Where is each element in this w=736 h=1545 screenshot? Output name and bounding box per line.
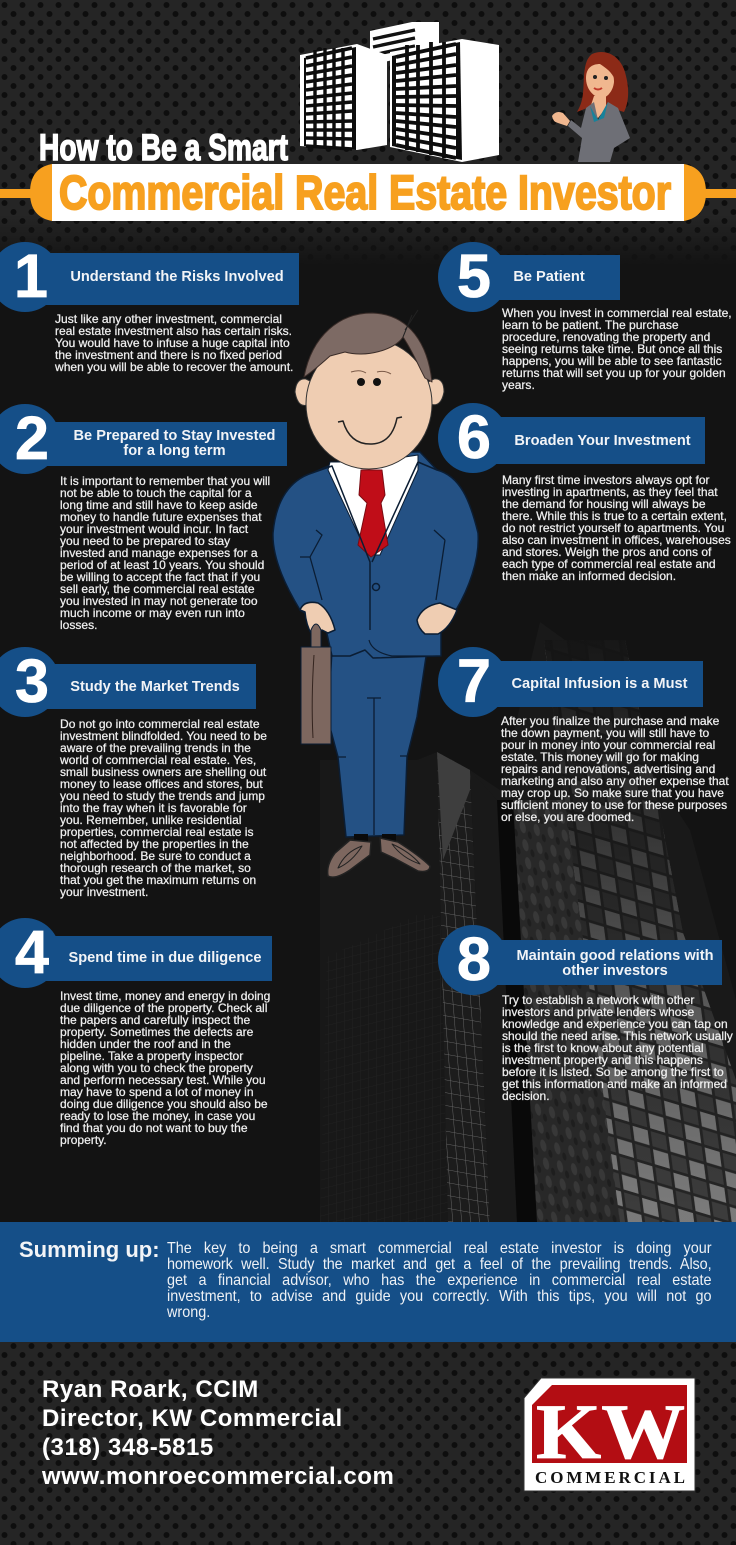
- step title: [74, 428, 275, 459]
- panel: step 8: [438, 925, 733, 1103]
- badge circle: [438, 403, 508, 473]
- step text: sufficient money to use for these purposes: [501, 798, 727, 812]
- illustration: businessman with briefcase: [272, 310, 479, 878]
- step text: estate. This money will go for making: [501, 750, 699, 764]
- step text: investors and private lenders whose: [502, 1005, 694, 1019]
- logo: KW Commercial: COMMERCIAL: [535, 1468, 685, 1487]
- step text: real estate investment also has certain risks.: [55, 324, 292, 338]
- step text: not affected by the properties in the: [60, 837, 249, 851]
- step title: [516, 948, 714, 979]
- step text: investment property and this happens: [502, 1053, 703, 1067]
- step text: you need to be prepared to stay: [60, 534, 230, 548]
- step text: find that you do not want to buy the: [60, 1121, 248, 1135]
- step text: thorough research of the market, so: [60, 861, 251, 875]
- icon: businesswoman: [552, 52, 630, 162]
- badge circle: [0, 647, 60, 717]
- summing up text: get a financial advisor, who has the experience in commercial real estate: [167, 1272, 712, 1289]
- contact details: (318) 348-5815: [42, 1434, 214, 1461]
- step text: or else, you are doomed.: [501, 810, 634, 824]
- contact details: Director, KW Commercial: [42, 1405, 343, 1432]
- contact details: [42, 1376, 394, 1490]
- step text: be willing to accept the fact that if you: [60, 570, 260, 584]
- step text: and perform necessary test. While you: [60, 1073, 266, 1087]
- step title: Understand the Risks Involved: [70, 269, 284, 285]
- step text: period of at least 10 years. You should: [60, 558, 264, 572]
- step text: you invested in may not generate too: [60, 594, 258, 608]
- badge circle: [0, 918, 60, 988]
- step text: neighborhood. Be sure to conduct a: [60, 849, 251, 863]
- number 8: 8: [457, 925, 491, 993]
- badge circle: [438, 242, 508, 312]
- step text: knowledge and experience you can tap on: [502, 1017, 728, 1031]
- step text: the investment and there is no fixed period: [55, 348, 282, 362]
- summing up text: [167, 1240, 712, 1321]
- step text: your investment would incur. In fact: [60, 522, 248, 536]
- step text: into the fray when it is favorable for: [60, 801, 247, 815]
- summing up label: Summing up:: [19, 1237, 160, 1262]
- step text: not be able to touch the capital for a: [60, 486, 252, 500]
- summing up text: homework well. Study the market and get a feel of the prevailing trends. Also,: [167, 1256, 712, 1273]
- step text: you need to study the trends and jump: [60, 789, 265, 803]
- step text: property. Sometimes the defects are: [60, 1025, 253, 1039]
- logo: KW Commercial: KW: [536, 1388, 685, 1475]
- logo: KW Commercial: [524, 1378, 696, 1492]
- step title: Be Prepared to Stay Invested: [74, 428, 275, 444]
- header bar: [488, 661, 703, 707]
- step text: doing due diligence you should also be: [60, 1097, 268, 1111]
- step text: when you will be able to recover the amount.: [55, 360, 293, 374]
- step text: due diligence of the property. Check all: [60, 1001, 267, 1015]
- step title: for a long term: [123, 443, 226, 459]
- panel: step 4: [0, 918, 272, 1147]
- step text: the down payment, you will still have to: [501, 726, 709, 740]
- summing up text: investment, to advise and guide you correctly. With this tips, you will not go: [167, 1288, 712, 1305]
- step text: Many first time investors always opt for: [502, 473, 710, 487]
- step text: decision.: [502, 1089, 550, 1103]
- step text: invested and manage expenses for a: [60, 546, 258, 560]
- step text: [54, 312, 293, 374]
- step text: Just like any other investment, commercial: [55, 312, 282, 326]
- step text: the papers and carefully inspect the: [60, 1013, 250, 1027]
- number 3: 3: [15, 647, 49, 715]
- step text: [500, 714, 729, 824]
- header bar: [40, 664, 256, 709]
- summing up text: The key to being a smart commercial real estate investor is doing your: [167, 1240, 712, 1257]
- number 1: 1: [14, 242, 48, 310]
- step text: world of commercial real estate. Yes,: [60, 753, 256, 767]
- step text: procedure, renovating the property and: [502, 330, 710, 344]
- step text: pour in money into your commercial real: [501, 738, 715, 752]
- badge circle: [0, 242, 60, 312]
- step text: investment blindfolded. You need to be: [60, 729, 267, 743]
- step text: then make an informed decision.: [502, 569, 676, 583]
- step text: do not restrict yourself to apartments. You: [502, 521, 724, 535]
- panel: step 5: [438, 242, 732, 392]
- panel: step 1: [0, 242, 299, 374]
- step text: repairs and renovations, advertising and: [501, 762, 715, 776]
- step title: Broaden Your Investment: [514, 433, 691, 449]
- step text: Try to establish a network with other: [502, 993, 694, 1007]
- step text: ready to lose the money, in case you: [60, 1109, 255, 1123]
- header bar: [40, 936, 272, 981]
- panel: summing up: [0, 1222, 736, 1342]
- step text: each type of commercial real estate and: [502, 557, 716, 571]
- step text: there. While this is true to a certain extent,: [502, 509, 727, 523]
- panel: step 2: [0, 404, 287, 632]
- contact details: www.monroecommercial.com: [42, 1463, 394, 1490]
- step title: other investors: [562, 963, 668, 979]
- header bar: [488, 417, 705, 464]
- step text: before it is listed. So be among the first to: [502, 1065, 724, 1079]
- step text: It is important to remember that you will: [60, 474, 270, 488]
- step text: happens, you will be able to see fantastic: [502, 354, 722, 368]
- step text: the demand for housing will always be: [502, 497, 706, 511]
- panel: step 7: [438, 647, 729, 824]
- step text: may crop up. So make sure that you have: [501, 786, 724, 800]
- panel: step 3: [0, 647, 267, 899]
- step text: that you get the maximum returns on: [60, 873, 256, 887]
- step text: When you invest in commercial real estate,: [502, 306, 732, 320]
- step title: Be Patient: [513, 269, 585, 285]
- step text: seeing returns take time. But once all this: [502, 342, 722, 356]
- step text: losses.: [60, 618, 98, 632]
- step text: pipeline. Take a property inspector: [60, 1049, 243, 1063]
- step text: may have to spend a lot of money in: [60, 1085, 254, 1099]
- step text: Do not go into commercial real estate: [60, 717, 260, 731]
- number 5: 5: [457, 242, 491, 310]
- step title: Capital Infusion is a Must: [512, 676, 687, 692]
- step title: Maintain good relations with: [516, 948, 714, 964]
- step text: [60, 717, 267, 899]
- summing up text: wrong.: [167, 1304, 210, 1321]
- step text: small business owners are shelling out: [60, 765, 266, 779]
- number 4: 4: [15, 918, 49, 986]
- step text: also can investment in offices, warehouses: [502, 533, 731, 547]
- step text: your investment.: [60, 885, 148, 899]
- step text: and stores. Weigh the pros and cons of: [502, 545, 711, 559]
- step text: money to handle future expenses that: [60, 510, 262, 524]
- step text: [502, 473, 731, 583]
- step text: years.: [502, 378, 535, 392]
- badge circle: [438, 925, 508, 995]
- badge circle: [0, 404, 60, 474]
- step text: After you finalize the purchase and make: [501, 714, 719, 728]
- step text: you. Remember, unlike residential: [60, 813, 241, 827]
- step text: properties, commercial real estate is: [60, 825, 254, 839]
- step text: learn to be patient. The purchase: [502, 318, 679, 332]
- step text: Invest time, money and energy in doing: [60, 989, 270, 1003]
- step text: much income or may even run into: [60, 606, 245, 620]
- badge circle: [438, 647, 508, 717]
- step text: is the first to know about any potential: [502, 1041, 704, 1055]
- step text: along with you to check the property: [60, 1061, 253, 1075]
- panel: step 6: [438, 403, 731, 583]
- contact details: Ryan Roark, CCIM: [42, 1376, 259, 1403]
- step text: investing in apartments, as they feel that: [502, 485, 718, 499]
- step text: long time and still have to keep aside: [60, 498, 258, 512]
- step text: aware of the prevailing trends in the: [60, 741, 251, 755]
- step text: sell early, the commercial real estate: [60, 582, 255, 596]
- step title: Spend time in due diligence: [68, 950, 262, 966]
- step text: returns that will set you up for your golden: [502, 366, 726, 380]
- header bar: [488, 940, 722, 985]
- icon: office buildings: [300, 22, 499, 162]
- step text: money to lease offices and stores, but: [60, 777, 263, 791]
- header bar: [40, 422, 287, 466]
- step text: [502, 306, 732, 392]
- header bar: [40, 253, 299, 305]
- number 2: 2: [15, 404, 49, 472]
- step text: [60, 474, 270, 632]
- step text: [60, 989, 270, 1147]
- step title: Study the Market Trends: [70, 679, 240, 695]
- step text: should the need arise. This network usually: [502, 1029, 733, 1043]
- number 7: 7: [457, 647, 491, 715]
- header bar: [488, 255, 620, 300]
- step text: [502, 993, 733, 1103]
- step text: marketing and also any other expense that: [501, 774, 729, 788]
- number 6: 6: [457, 403, 491, 471]
- step text: get this information and make an informed: [502, 1077, 727, 1091]
- step text: property.: [60, 1133, 107, 1147]
- step text: You would have to infuse a huge capital into: [55, 336, 290, 350]
- step text: hidden under the roof and in the: [60, 1037, 231, 1051]
